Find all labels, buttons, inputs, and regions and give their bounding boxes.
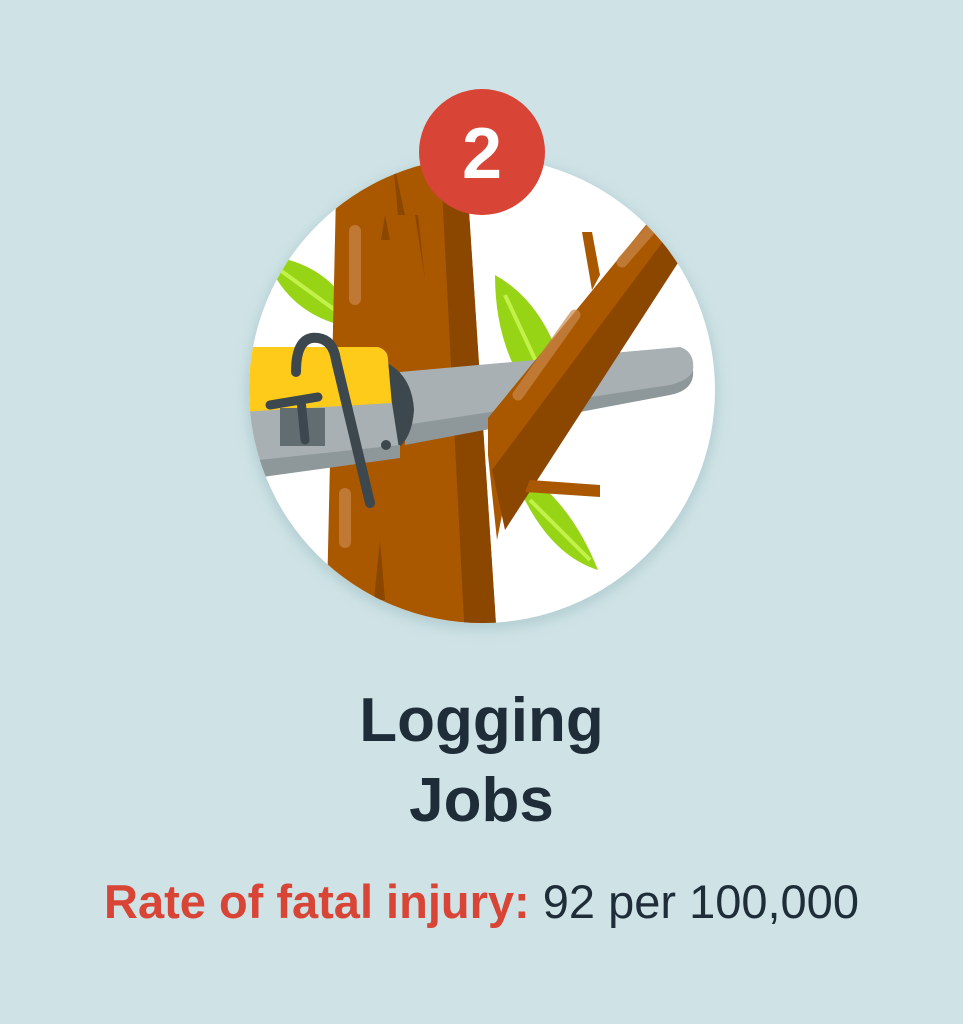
stat line: Rate of fatal injury: 92 per 100,000 <box>104 875 859 928</box>
badge: number 2: 2 <box>462 114 502 194</box>
trunk <box>326 150 497 640</box>
chainsaw <box>240 338 693 503</box>
title: Logging: Logging <box>359 686 604 755</box>
badge: number 2 <box>419 89 545 215</box>
branch <box>488 220 685 540</box>
icon circle <box>240 150 715 640</box>
title: Jobs: Jobs <box>409 766 554 835</box>
leaves <box>265 255 598 570</box>
illustration <box>243 89 721 633</box>
